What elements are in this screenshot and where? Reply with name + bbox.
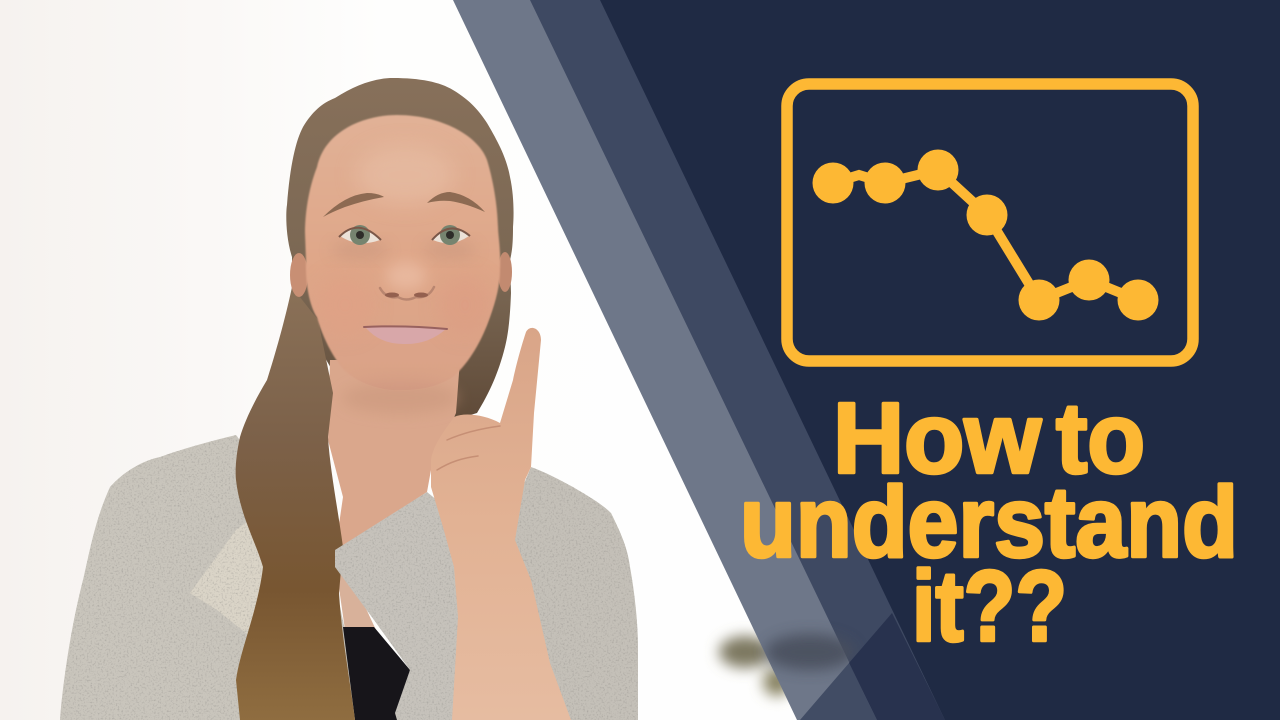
headline: it?? <box>912 550 1067 662</box>
lower crossing: mid wedge <box>800 663 877 720</box>
plant shadow seen through bands <box>765 634 855 670</box>
lower crossing: dark wedge <box>849 613 945 720</box>
chin shadow on neck <box>342 382 458 414</box>
left ear <box>290 253 308 297</box>
headline: understand <box>740 466 1238 578</box>
right ear <box>498 252 512 292</box>
face shading <box>314 152 494 390</box>
nose <box>380 262 434 300</box>
right eye <box>432 225 470 245</box>
chart icon frame <box>787 84 1193 361</box>
skin below lapel <box>335 560 376 630</box>
long hair <box>236 287 355 720</box>
left collar flap <box>190 513 275 637</box>
mouth <box>364 326 447 344</box>
cardigan right side <box>500 467 638 720</box>
diagonal band: mid slate <box>530 0 1280 720</box>
blurred plant <box>719 636 791 696</box>
right lapel <box>335 492 480 720</box>
line chart <box>812 150 1158 320</box>
diagonal band: light slate <box>453 0 1280 720</box>
finger folds <box>437 426 500 470</box>
left eyebrow <box>323 193 384 217</box>
headline: to <box>1056 382 1145 494</box>
headline: How <box>833 382 1041 494</box>
face <box>305 115 500 390</box>
cardigan body <box>60 435 410 720</box>
right eyebrow <box>427 192 485 212</box>
left eye <box>339 225 381 245</box>
navy panel <box>600 0 1280 720</box>
back hair <box>286 78 514 420</box>
arm, fist and pointing finger <box>431 328 571 720</box>
headline <box>740 382 1238 662</box>
neck and chest <box>328 360 460 552</box>
person photo illustration <box>60 78 638 720</box>
black top <box>343 627 410 720</box>
